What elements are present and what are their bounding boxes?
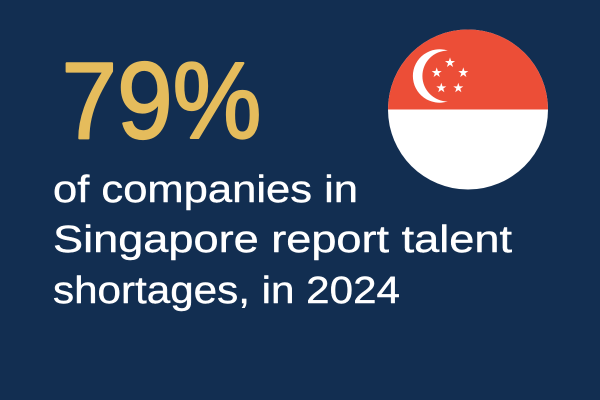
- crescent: [413, 49, 448, 103]
- line 3: shortages, in 2024: [53, 270, 400, 312]
- icon: Singapore flag circle: [388, 29, 548, 189]
- line 1: of companies in: [53, 169, 358, 211]
- five stars: [432, 57, 468, 92]
- big statistic: 79%: 79%: [62, 40, 262, 162]
- flag red upper half: [388, 29, 548, 109]
- line 2: Singapore report talent: [53, 219, 513, 261]
- description text: [53, 169, 513, 312]
- flag white lower half: [388, 30, 548, 190]
